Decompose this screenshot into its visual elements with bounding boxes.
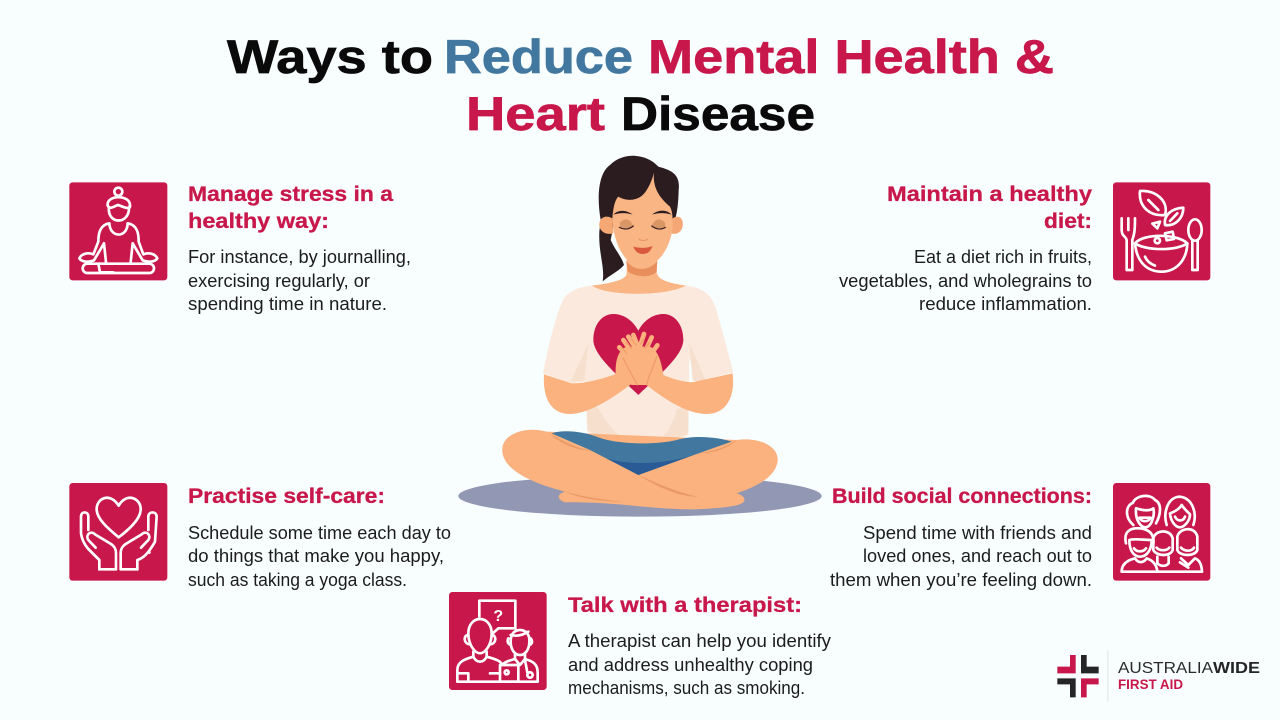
heading: Manage stress in a: [188, 183, 393, 206]
shorts: [552, 431, 732, 475]
panel: social connections: [830, 483, 1210, 590]
panel: manage stress: healthy way:: [188, 210, 329, 233]
heart on shirt: [593, 314, 683, 395]
body text: [568, 631, 831, 698]
logo: Australia Wide First Aid: WIDE: [1213, 660, 1260, 677]
body text: exercising regularly, or: [188, 271, 370, 291]
crossed legs: [502, 430, 778, 509]
body text: and address unhealthy coping: [568, 655, 813, 675]
illustration: meditating woman with heart: [458, 156, 822, 517]
icon: therapist and patient: [449, 592, 547, 690]
face: [612, 173, 673, 267]
panel: manage stress: [69, 182, 411, 314]
title: Mental Health &: [648, 30, 1054, 83]
logo wordmark: AUSTRALIA: [1118, 660, 1213, 677]
title: Disease: [621, 87, 815, 140]
body text: loved ones, and reach out to: [863, 546, 1092, 566]
panel: healthy diet: diet:: [1044, 210, 1092, 233]
logo: Australia Wide First Aid: [1057, 650, 1260, 702]
body text: spending time in nature.: [188, 294, 387, 314]
t-shirt: [543, 286, 733, 443]
title: Heart: [466, 87, 605, 140]
heading: Practise self-care:: [188, 485, 385, 508]
body text: do things that make you happy,: [188, 546, 444, 566]
body text: [188, 523, 451, 590]
icon: meditation: [69, 182, 167, 280]
icon: therapist and patient: ?: [493, 608, 503, 625]
title: Ways to: [227, 30, 433, 83]
icon: food bowl: [1113, 182, 1210, 280]
body text: Schedule some time each day to: [188, 523, 451, 543]
ears: [599, 217, 683, 234]
panel: self-care: [69, 483, 451, 590]
yoga mat shadow: [458, 475, 822, 517]
heading: Build social connections:: [832, 485, 1092, 508]
icon: hands holding heart: [69, 483, 167, 581]
panel: healthy diet: [839, 182, 1210, 314]
icon: group of people: [1113, 483, 1210, 581]
body text: [188, 247, 411, 314]
body text: [839, 247, 1092, 314]
body text: Spend time with friends and: [863, 523, 1092, 543]
body text: A therapist can help you identify: [568, 631, 831, 651]
body text: vegetables, and wholegrains to: [839, 271, 1092, 291]
body text: Eat a diet rich in fruits,: [914, 247, 1092, 267]
logo: Australia Wide First Aid: FIRST AID: [1118, 676, 1183, 692]
title: Reduce: [444, 30, 633, 83]
leg creases: [550, 433, 737, 502]
neck: [592, 257, 686, 294]
body text: such as taking a yoga class.: [188, 570, 407, 590]
body text: mechanisms, such as smoking.: [568, 678, 805, 698]
heading: Talk with a therapist:: [568, 594, 802, 617]
title: [227, 30, 1054, 140]
body text: reduce inflammation.: [919, 294, 1092, 314]
panel: therapist: [449, 592, 831, 698]
logo mark: [1057, 650, 1108, 702]
body text: them when you’re feeling down.: [830, 570, 1092, 590]
heading: Maintain a healthy: [887, 183, 1092, 206]
facial features: [613, 211, 672, 254]
body text: [830, 523, 1092, 590]
hair and ponytail: [599, 156, 679, 281]
body text: For instance, by journalling,: [188, 247, 411, 267]
arms and hands: [544, 334, 733, 414]
